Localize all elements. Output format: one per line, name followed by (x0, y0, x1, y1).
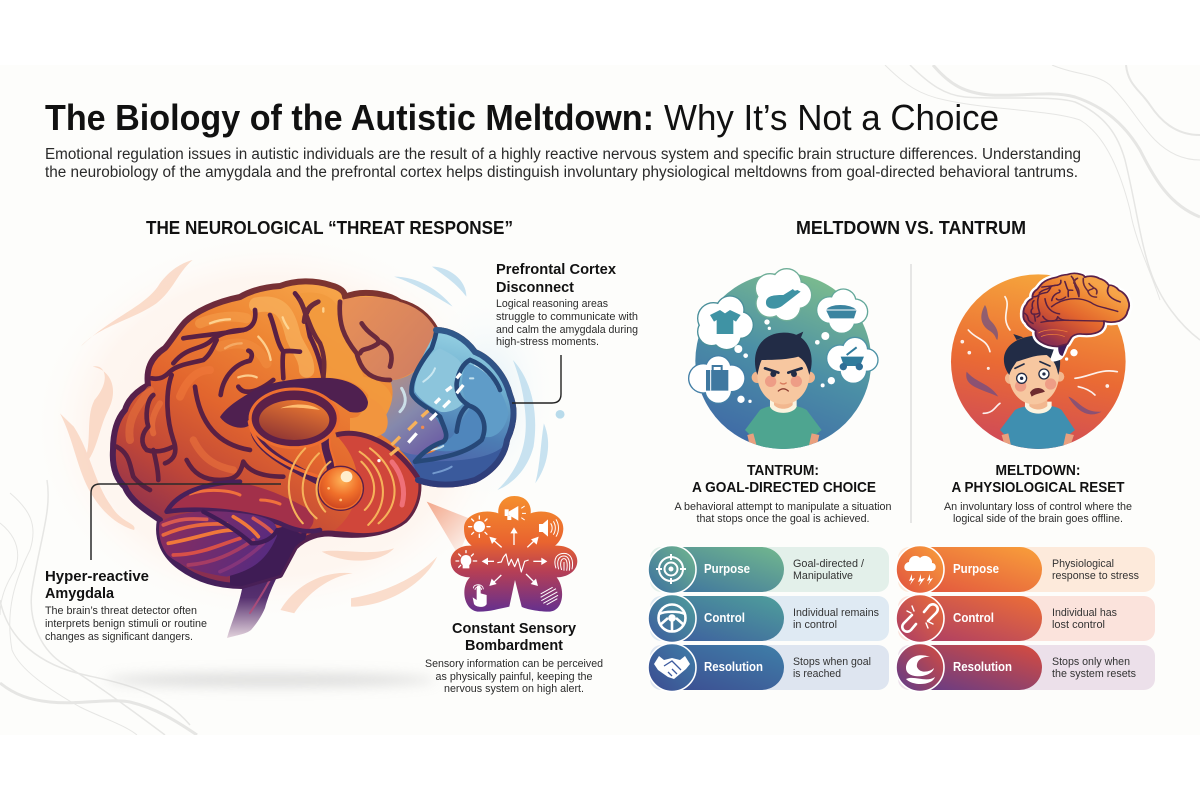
label: prefrontal cortex disconnect: struggle to communicate with (496, 311, 638, 323)
thought dots (1065, 349, 1078, 361)
icon: broken link (902, 604, 938, 632)
row: tantrum control: Individual remains (793, 607, 879, 619)
temporal outline (336, 433, 418, 478)
intro text: Emotional regulation issues in autistic individuals are the result of a highly reactive nervous system and specific brain structure differences. Understanding (45, 146, 1081, 163)
callout line: prefrontal (512, 355, 561, 403)
label: hyper-reactive amygdala: changes as significant dangers. (45, 631, 193, 643)
thought bubble: hat (817, 290, 867, 333)
sun icon (469, 516, 490, 537)
label: constant sensory bombardment: nervous system on high alert. (444, 683, 584, 695)
row: tantrum resolution: is reached (793, 668, 841, 680)
brain illustration (26, 227, 565, 638)
row: meltdown control: Control (953, 611, 994, 625)
connector to amygdala (325, 438, 331, 473)
boy face (757, 346, 809, 404)
row: tantrum resolution: Resolution (704, 660, 763, 674)
label: hyper-reactive amygdala (45, 569, 207, 643)
section heading: meltdown vs tantrum: MELTDOWN VS. TANTRUM (796, 218, 1026, 238)
text: meltdown: A PHYSIOLOGICAL RESET (952, 479, 1124, 496)
thought bubble: cart (827, 338, 877, 383)
row: meltdown purpose: response to stress (1052, 570, 1139, 582)
pointer wedge (427, 502, 473, 555)
boy body (745, 406, 822, 449)
fingerprint icon (555, 553, 573, 571)
title: The Biology of the Autistic Meltdown: (45, 97, 654, 138)
text: tantrum: that stops once the goal is achieved. (696, 513, 870, 525)
label: hyper-reactive amygdala: Hyper-reactive (45, 569, 149, 585)
brain glow and wisps (26, 227, 565, 627)
boy ear left (1005, 373, 1016, 384)
intro text (45, 146, 1081, 181)
label: constant sensory bombardment (425, 620, 603, 695)
row: tantrum control: Control (704, 611, 745, 625)
boy face (1009, 346, 1059, 404)
connector core (325, 437, 331, 473)
text: meltdown: logical side of the brain goes offline. (953, 513, 1123, 525)
row: tantrum control (648, 594, 889, 642)
row: meltdown control: Individual has (1052, 607, 1117, 619)
disconnected signal dashes (377, 373, 463, 462)
row: meltdown control: lost control (1052, 619, 1105, 631)
row: meltdown purpose (896, 546, 1155, 594)
label: hyper-reactive amygdala: Amygdala (45, 586, 115, 602)
thalamus ring (250, 389, 338, 448)
callout line: amygdala (91, 484, 281, 560)
brain base shape (113, 281, 514, 586)
temporal highlight (392, 462, 404, 505)
nerve signal zigzag (497, 554, 529, 572)
boy hair (755, 333, 812, 375)
row: tantrum resolution (648, 644, 889, 692)
cheeks (765, 376, 776, 387)
speaker icon (539, 519, 558, 537)
boy body (1000, 406, 1075, 449)
brain stem (227, 540, 295, 638)
boy ears (752, 372, 763, 383)
gyrus cores (129, 304, 307, 470)
label: prefrontal cortex disconnect: Disconnect (496, 280, 574, 296)
text: meltdown: An involuntary loss of control where the (944, 501, 1132, 513)
prefrontal lilac transition (380, 372, 444, 455)
radiating arrows (482, 527, 547, 586)
text: meltdown (944, 462, 1132, 525)
row: meltdown control (896, 594, 1155, 642)
burst shape (451, 496, 577, 612)
title: Why It’s Not a Choice (664, 97, 999, 138)
strand shadow (255, 432, 317, 480)
ground shadow (105, 673, 435, 687)
icon: wave (906, 655, 935, 684)
row: tantrum purpose: Purpose (704, 562, 750, 576)
icon: handshake (654, 656, 690, 679)
small thought dots (734, 319, 835, 403)
thought bubble: bag (689, 356, 744, 403)
row: meltdown resolution: the system resets (1052, 668, 1136, 680)
navy outline of prefrontal lobe (418, 330, 514, 484)
bulb icon (456, 551, 477, 568)
white squiggles (961, 297, 1117, 413)
illustration: meltdown child (951, 273, 1129, 453)
top orange column (322, 341, 392, 416)
text: tantrum: TANTRUM: (747, 462, 819, 479)
thought bubble: toy (756, 269, 811, 320)
lower temporal lobe (163, 482, 320, 533)
label: hyper-reactive amygdala: The brain’s threat detector often (45, 605, 197, 617)
row: tantrum purpose: Manipulative (793, 570, 853, 582)
meltdown background circle (951, 274, 1126, 449)
text: tantrum: A behavioral attempt to manipulate a situation (674, 501, 892, 513)
label: prefrontal cortex disconnect: Logical reasoning areas (496, 298, 608, 310)
row: meltdown resolution: Stops only when (1052, 656, 1130, 668)
row: meltdown resolution: Resolution (953, 660, 1012, 674)
row: meltdown purpose: Physiological (1052, 558, 1114, 570)
cheek right (791, 376, 802, 387)
boy neck and collar (1025, 402, 1052, 414)
angry eyes and mouth (765, 368, 802, 391)
label: constant sensory bombardment: Sensory information can be perceived (425, 658, 603, 670)
prefrontal sulci (411, 330, 500, 462)
illustration: tantrum child (689, 269, 877, 453)
prefrontal blue lobe (400, 330, 511, 483)
boy neck and collar (770, 400, 797, 413)
cheeks (1015, 380, 1026, 392)
label: prefrontal cortex disconnect (496, 262, 638, 348)
intro text: the neurobiology of the amygdala and the prefrontal cortex helps distinguish involuntary physiological meltdowns from goal-directed behavioral tantrums. (45, 164, 1078, 181)
amygdala (317, 466, 364, 511)
pointing hand icon (473, 585, 487, 607)
label: prefrontal cortex disconnect: Prefrontal Cortex (496, 262, 616, 278)
thalamus core (259, 400, 329, 440)
scared eyes and mouth (1015, 362, 1050, 397)
row: tantrum control: in control (793, 619, 837, 631)
thalamus shine (280, 404, 320, 410)
icon: steering wheel (658, 604, 686, 632)
brain interior (117, 292, 511, 600)
text: tantrum (674, 462, 892, 525)
icon: sensory bombardment burst (427, 496, 577, 612)
central dark band (220, 378, 368, 428)
label: constant sensory bombardment: Bombardment (465, 637, 563, 654)
label: hyper-reactive amygdala: interprets benign stimuli or routine (45, 618, 207, 630)
megaphone icon (505, 506, 526, 521)
stress wisps (966, 305, 1102, 414)
divider (910, 264, 912, 523)
text: meltdown: MELTDOWN: (996, 462, 1080, 479)
boy hair (1004, 336, 1060, 375)
row: tantrum resolution: Stops when goal (793, 656, 871, 668)
tantrum background circle (695, 273, 871, 449)
mini brain (1023, 273, 1129, 359)
icon: target (656, 554, 686, 584)
underside shadow (230, 527, 307, 586)
text: tantrum: A GOAL-DIRECTED CHOICE (692, 479, 876, 496)
label: prefrontal cortex disconnect: and calm the amygdala during (496, 324, 638, 336)
threat arcs (289, 448, 395, 525)
textured print icon (541, 587, 558, 605)
left and top sulci (117, 293, 323, 490)
row: tantrum purpose (648, 546, 889, 594)
boy right ear (804, 372, 815, 383)
thalamus and amygdala details (249, 389, 395, 525)
row: meltdown resolution (896, 644, 1155, 692)
highlights (210, 308, 323, 377)
label: prefrontal cortex disconnect: high-stress moments. (496, 336, 599, 348)
section heading: threat response: THE NEUROLOGICAL “THREAT RESPONSE” (146, 218, 513, 238)
cheek right (1045, 378, 1056, 390)
cerebellum (155, 511, 277, 577)
wrap-around orange below band (350, 414, 388, 437)
icon: storm cloud (904, 556, 936, 586)
central sulci (300, 300, 392, 380)
strand (249, 422, 317, 476)
thought bubble: shirt (698, 297, 753, 349)
label: constant sensory bombardment: as physically painful, keeping the (436, 671, 592, 683)
frontal salmon lobe (340, 297, 437, 380)
temporal lobe (335, 433, 420, 533)
row: meltdown purpose: Purpose (953, 562, 999, 576)
boy ear right (1054, 372, 1064, 382)
label: constant sensory bombardment: Constant Sensory (452, 620, 577, 637)
row: tantrum purpose: Goal-directed / (793, 558, 865, 570)
